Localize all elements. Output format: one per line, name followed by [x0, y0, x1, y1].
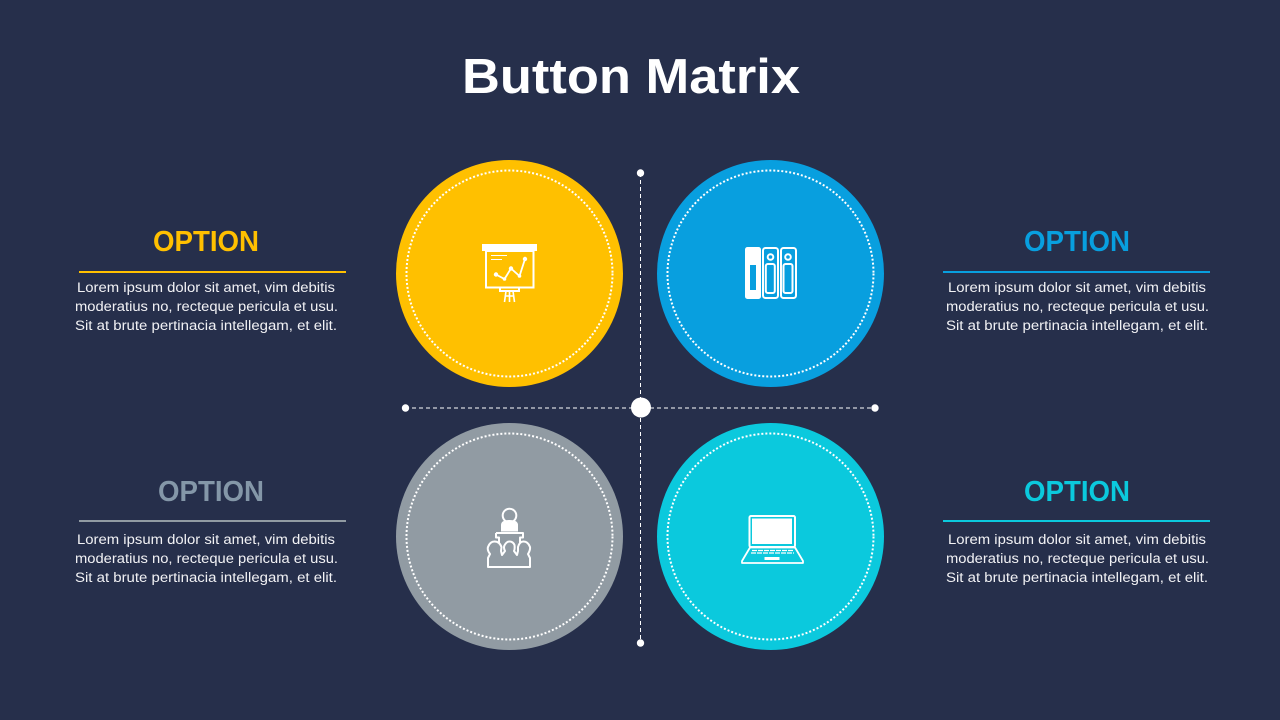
text block: bottom right [943, 476, 1210, 585]
heading: OPTION [153, 226, 259, 258]
text block: top right [943, 226, 1210, 333]
button: yellow [396, 160, 623, 387]
body text: Lorem ipsum dolor sit amet, vim debitis [77, 280, 335, 295]
body text: Lorem ipsum dolor sit amet, vim debitis [948, 532, 1206, 547]
heading: OPTION [158, 476, 264, 508]
center dot [631, 398, 651, 418]
heading: OPTION [1024, 226, 1130, 258]
body text: Sit at brute pertinacia intellegam, et elit. [75, 318, 337, 333]
body text: moderatius no, recteque pericula et usu. [946, 551, 1209, 566]
body text: moderatius no, recteque pericula et usu. [946, 299, 1209, 314]
button: teal [657, 423, 884, 650]
body text [946, 532, 1209, 585]
vertical axis [637, 169, 644, 647]
icon: binders [745, 247, 796, 299]
text block: top left [75, 226, 346, 333]
body text [946, 280, 1209, 333]
button: blue [657, 160, 884, 387]
body text: Sit at brute pertinacia intellegam, et elit. [946, 570, 1208, 585]
body text [75, 532, 338, 585]
title: Button Matrix [462, 50, 800, 104]
body text [75, 280, 338, 333]
body text: Lorem ipsum dolor sit amet, vim debitis [77, 532, 335, 547]
body text: Sit at brute pertinacia intellegam, et elit. [75, 570, 337, 585]
icon: audience and speaker [488, 509, 530, 567]
button: grey [396, 423, 623, 650]
text block: bottom left [75, 476, 346, 585]
horizontal axis [402, 404, 879, 412]
icon: presentation board [482, 244, 537, 302]
body text: moderatius no, recteque pericula et usu. [75, 551, 338, 566]
body text: Lorem ipsum dolor sit amet, vim debitis [948, 280, 1206, 295]
body text: Sit at brute pertinacia intellegam, et elit. [946, 318, 1208, 333]
icon: laptop [742, 516, 803, 563]
heading: OPTION [1024, 476, 1130, 508]
body text: moderatius no, recteque pericula et usu. [75, 299, 338, 314]
